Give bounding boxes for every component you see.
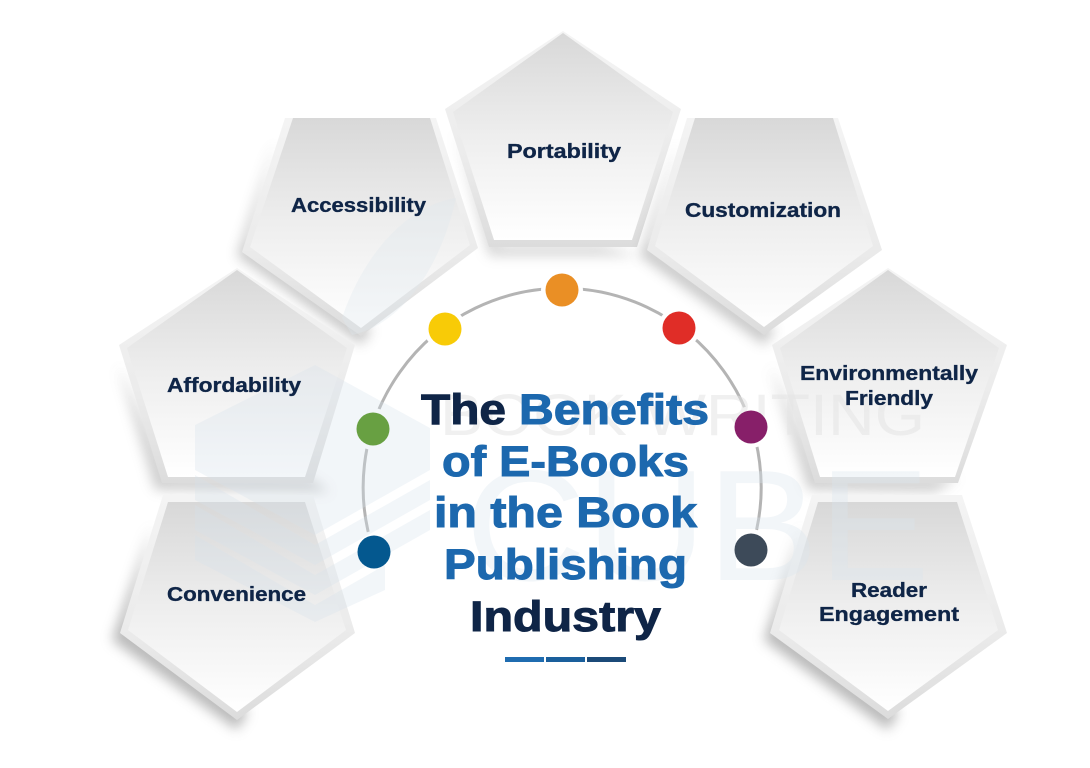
panel: Affordability [118,268,355,492]
label: Environmentally Friendly: Friendly [845,388,934,410]
dot: green [356,412,390,446]
label: Convenience: Convenience [167,584,306,606]
label: Reader Engagement [819,580,959,626]
watermark text: book writing: BOOK WRITING [440,383,925,448]
title [421,386,709,641]
dot: dark slate [734,534,768,566]
panel: Reader Engagement [764,495,1007,730]
watermark icon: feather [342,198,456,335]
dot: red [662,312,696,344]
title: of E-Books [442,438,689,486]
panel: Environmentally Friendly [770,268,1007,492]
label: Environmentally Friendly [800,363,979,410]
arc connector [352,269,772,573]
dot: blue [358,536,390,568]
title: The [421,386,506,434]
dot: orange [546,274,578,306]
label: Environmentally Friendly: Environmentally [800,363,979,385]
title underline [505,657,626,662]
panel: Convenience [112,495,355,730]
panel: Customization [640,118,882,345]
dot: yellow [428,312,462,346]
title: Publishing [444,541,687,589]
label: Reader Engagement: Engagement [819,604,959,626]
timeline dots [356,274,768,568]
panel: Accessibility [237,118,478,345]
title: in the Book [434,489,697,537]
watermark: book writing logo [195,198,930,622]
watermark text: cube: CUBE [465,438,930,614]
dot: purple [734,410,768,444]
panel: Portability [445,31,681,256]
title: Industry [470,593,661,641]
label: Reader Engagement: Reader [851,580,927,602]
label: Portability: Portability [507,141,622,163]
label: Affordability: Affordability [167,375,302,397]
watermark icon: book stack [195,365,430,622]
title: Benefits [519,386,709,434]
label: Customization: Customization [685,200,841,222]
label: Accessibility: Accessibility [291,195,427,217]
